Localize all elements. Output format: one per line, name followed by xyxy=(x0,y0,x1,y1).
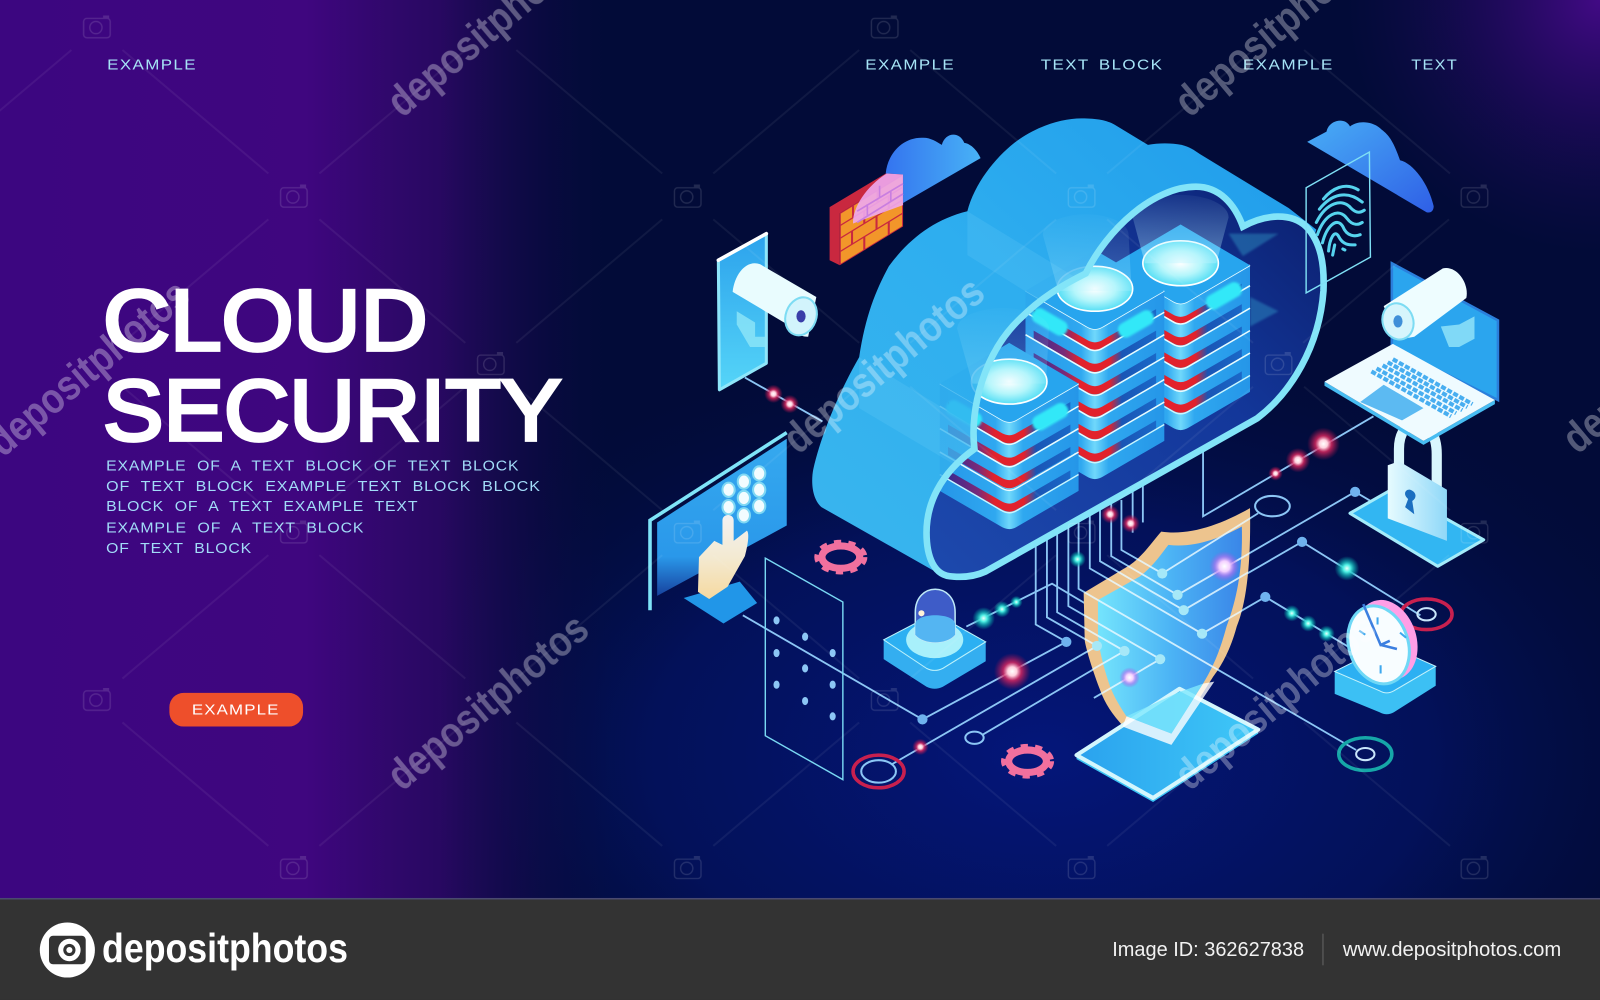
navigation: right items xyxy=(865,57,1458,73)
server stacks seen through cloud xyxy=(940,224,1250,529)
watermark text xyxy=(0,0,1600,799)
watermark text: depositphotos xyxy=(774,267,994,463)
glows on shield lines xyxy=(912,428,1359,755)
watermark diagonal lines xyxy=(0,50,1450,846)
navigation: right items: TEXT BLOCK xyxy=(1041,57,1163,73)
glows on phone line xyxy=(764,385,799,413)
button xyxy=(169,693,303,727)
watermark text: depositphotos xyxy=(1165,604,1385,799)
watermark camera icons xyxy=(84,15,1488,879)
icon: dome sensor xyxy=(884,589,986,689)
keypad keys xyxy=(722,466,765,522)
body text block: OF TEXT BLOCK EXAMPLE TEXT BLOCK BLOCK xyxy=(106,479,541,495)
glows on vertical lines xyxy=(1069,505,1140,567)
cloud ring outline xyxy=(927,187,1324,577)
gear left xyxy=(817,542,865,572)
tablet under shield xyxy=(1077,682,1258,802)
nodes xyxy=(917,487,1360,724)
glow cones above servers xyxy=(957,195,1229,384)
icon: keypad monitor xyxy=(650,433,787,623)
footer logo icon xyxy=(40,922,95,978)
icon: clock xyxy=(1335,592,1436,714)
icon: phone with camera xyxy=(718,234,822,390)
icon: laptop with camera xyxy=(1324,263,1498,445)
cloud lobe shading xyxy=(859,211,1122,480)
title: SECURITY xyxy=(103,362,561,459)
body text block xyxy=(106,458,541,557)
icon: fingerprint panel xyxy=(1306,152,1370,293)
keyboard xyxy=(1371,359,1472,416)
footer image id: Image ID: 362627838 xyxy=(1112,939,1304,961)
footer url: www.depositphotos.com xyxy=(1342,939,1561,961)
teal glows near dome xyxy=(972,596,1022,630)
big cloud xyxy=(812,118,1324,577)
ring terminals xyxy=(853,496,1452,788)
icon: firewall xyxy=(830,135,981,265)
title: CLOUD xyxy=(103,272,428,369)
footer bar xyxy=(0,898,1600,1000)
title xyxy=(103,272,561,459)
lines across the shield xyxy=(1084,517,1250,694)
interior light beam xyxy=(1229,234,1279,327)
circuit lines xyxy=(743,378,1420,764)
cloud interior xyxy=(927,187,1324,577)
footer logo text: depositphotos xyxy=(102,925,348,971)
body text block: EXAMPLE OF A TEXT BLOCK OF TEXT BLOCK xyxy=(106,458,519,474)
body text block: EXAMPLE OF A TEXT BLOCK xyxy=(106,521,364,537)
small left cloud xyxy=(886,135,981,203)
dotted glass panel xyxy=(765,558,843,780)
cloud body xyxy=(812,118,1316,577)
body text block: OF TEXT BLOCK xyxy=(106,541,252,557)
server stacks xyxy=(940,224,1250,529)
navigation: right items: EXAMPLE xyxy=(865,57,955,73)
camera xyxy=(1441,316,1474,347)
navigation: right items: TEXT xyxy=(1411,57,1458,73)
hand xyxy=(698,515,748,599)
watermark text: depositphotos xyxy=(378,604,598,799)
keypad pad xyxy=(684,582,757,623)
button: EXAMPLE xyxy=(192,702,280,718)
navigation: left item: EXAMPLE xyxy=(107,57,197,73)
icon: small right cloud xyxy=(1307,121,1434,212)
gear bottom xyxy=(1004,746,1052,776)
icon: padlock xyxy=(1350,423,1484,566)
navigation: right items: EXAMPLE xyxy=(1243,57,1334,73)
body text block: BLOCK OF A TEXT EXAMPLE TEXT xyxy=(106,499,418,515)
icon: shield xyxy=(1084,508,1250,724)
